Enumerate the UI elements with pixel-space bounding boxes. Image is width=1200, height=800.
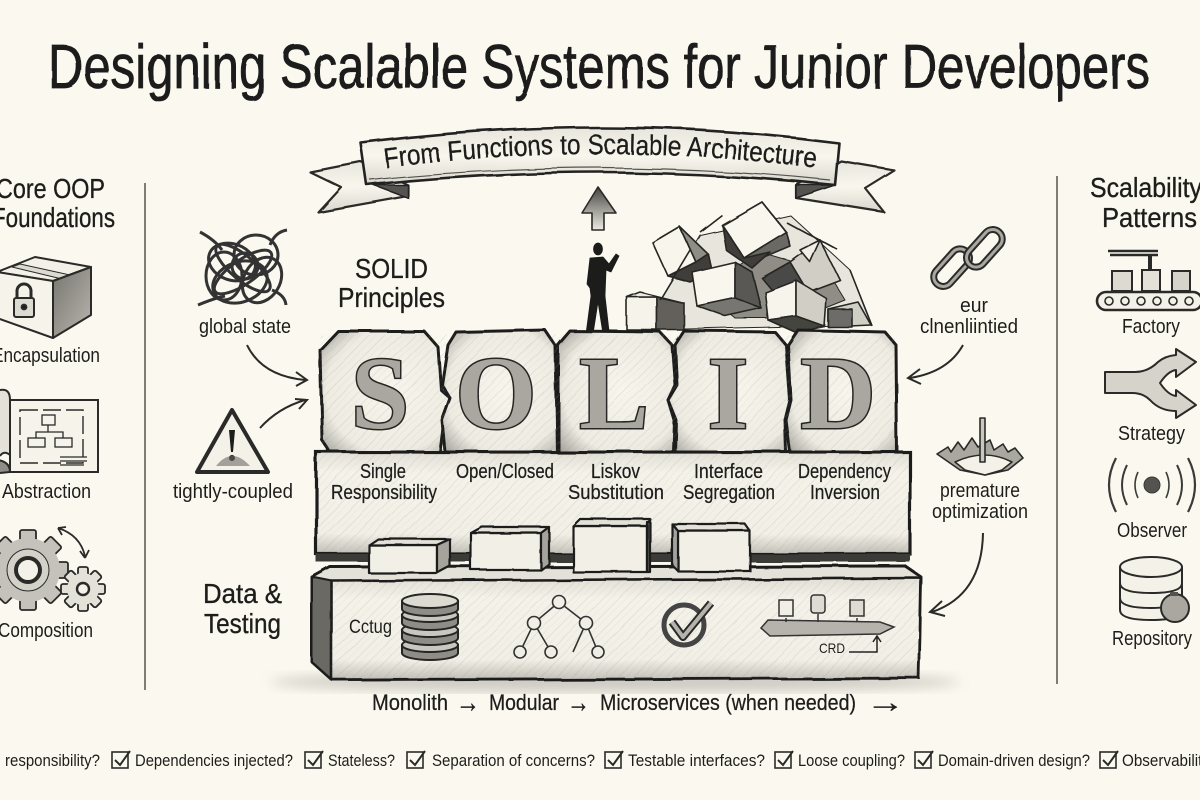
person silhouette: [586, 243, 619, 334]
label: Strategy: Strategy: [1118, 423, 1185, 445]
right column: Scalability Patterns: [1090, 172, 1200, 650]
banner main band: [361, 128, 839, 185]
tier: data and testing slab: [312, 566, 921, 680]
SOLID labels: Segregation: [683, 482, 775, 504]
icon: strategy fork arrow: [1105, 349, 1196, 418]
review checklist: Domain-driven design?: [938, 751, 1090, 770]
review checklist: Dependencies injected?: [135, 751, 293, 770]
label: chain caption: [920, 295, 1018, 338]
SOLID labels: Dependency: [798, 461, 891, 483]
arrow: upward: [582, 187, 616, 230]
SOLID letters: S: [351, 336, 409, 451]
label: Abstraction: Abstraction: [2, 481, 91, 503]
stone I: [668, 331, 790, 452]
tier: principles slab: [316, 452, 910, 562]
label: premature optimization: optimization: [932, 501, 1028, 523]
SOLID letters: L: [579, 336, 649, 451]
banner right tail: [796, 161, 894, 212]
evolution path text: Monolith: [372, 690, 448, 715]
heading: SOLID Principles: SOLID: [355, 253, 428, 284]
label: CI/CD: CRD: [819, 640, 845, 656]
review checklist: Testable interfaces?: [628, 751, 765, 770]
cube: low right: [828, 302, 871, 327]
cube pile: [627, 202, 872, 332]
icon: spike trap: [937, 418, 1023, 475]
icon: tangled lines: [198, 230, 290, 310]
anti-pattern: premature optimization: [932, 418, 1028, 523]
icon: check mark: [664, 603, 711, 645]
SOLID labels: Inversion: [810, 482, 880, 504]
SOLID labels: Single: [360, 461, 406, 483]
evolution path text: Microservices (when needed): [600, 690, 856, 715]
review checklist: Stateless?: [328, 751, 395, 770]
icon: observer signal: [1109, 458, 1195, 512]
left column: Core OOP Foundations: [0, 173, 115, 642]
heading: Data and Testing: Testing: [204, 608, 281, 639]
label: Factory: Factory: [1122, 316, 1180, 338]
SOLID labels: Liskov: [591, 461, 640, 483]
cube: upper right: [762, 240, 840, 300]
banner text: From Functions to Scalable Architecture: [384, 134, 816, 168]
SOLID labels: Interface: [694, 461, 763, 483]
cube: lower right: [765, 280, 826, 332]
arrow: chain to SOLID: [908, 345, 963, 384]
icon: chain links: [930, 226, 1006, 290]
label: chain caption: eur: [960, 295, 988, 317]
arrow: premature optimization to foundation: [930, 533, 983, 616]
SOLID letters: O: [456, 336, 536, 451]
label: global state: global state: [199, 316, 291, 338]
review checklist: [5, 751, 1200, 770]
cube: low left: [627, 292, 684, 330]
label: tightly-coupled: tightly-coupled: [173, 481, 293, 503]
anti-pattern: tightly-coupled: [173, 410, 293, 503]
heading: SOLID Principles: Principles: [338, 282, 445, 313]
icon: warning triangle: [197, 410, 268, 472]
heading: Data and Testing: Data &: [203, 578, 282, 609]
icon: CI/CD pipeline: [761, 595, 894, 656]
SOLID letters: D: [800, 336, 876, 451]
stone L: [558, 331, 675, 452]
SOLID letters: [351, 336, 876, 451]
SOLID letters: I: [708, 336, 748, 451]
SOLID labels: Open/Closed: [456, 461, 554, 483]
block 3: [573, 519, 650, 572]
SOLID stones: [320, 330, 897, 452]
review checklist: Loose coupling?: [798, 751, 905, 770]
label: Observer: Observer: [1117, 520, 1187, 542]
SOLID labels: Substitution: [568, 482, 664, 504]
arrow: tightly-coupled to SOLID: [260, 399, 307, 428]
icon: factory conveyor: [1097, 251, 1200, 310]
review checklist: Separation of concerns?: [432, 751, 595, 770]
label: premature optimization: premature: [940, 480, 1020, 502]
anti-pattern: chain: [920, 226, 1018, 338]
connector blocks: [369, 519, 750, 573]
evolution path text: Modular: [489, 690, 559, 715]
review checklist: responsibility?: [5, 751, 100, 770]
cube: left: [653, 227, 712, 282]
icon: tree diagram: [514, 596, 604, 658]
heading: [0, 173, 115, 233]
icon: blueprint scroll: [0, 390, 98, 473]
block 4: [672, 524, 750, 571]
heading: [1090, 172, 1200, 233]
evolution path text: →: [866, 686, 905, 719]
icon: gears: [0, 527, 105, 611]
block 2: [471, 527, 549, 570]
banner left tail: [310, 162, 408, 212]
stone O: [442, 330, 557, 452]
evolution path text: [372, 686, 905, 719]
arrow: global state to SOLID: [247, 345, 307, 386]
label: Composition: Composition: [0, 620, 93, 642]
label: premature optimization: [932, 480, 1028, 523]
block 1: [369, 539, 450, 573]
label: Cctug: Cctug: [349, 617, 392, 638]
icon: locked box: [0, 257, 91, 338]
label: chain caption: clnenliintied: [920, 316, 1018, 338]
cube: top: [722, 202, 790, 268]
SOLID labels: [331, 461, 891, 504]
stone D: [786, 330, 897, 452]
evolution path text: →: [567, 686, 590, 719]
icon: database stack: [402, 594, 458, 660]
heading: Data and Testing: [203, 578, 282, 639]
stone S: [320, 331, 450, 452]
heading: SOLID Principles: [338, 253, 445, 313]
SOLID labels: Responsibility: [331, 482, 437, 504]
foundation shadow: [270, 672, 960, 692]
evolution path text: →: [456, 686, 480, 719]
banner: [310, 128, 894, 212]
cube: center: [692, 262, 761, 316]
icon: repository database: [1120, 557, 1189, 622]
anti-pattern: global state: [198, 230, 291, 338]
